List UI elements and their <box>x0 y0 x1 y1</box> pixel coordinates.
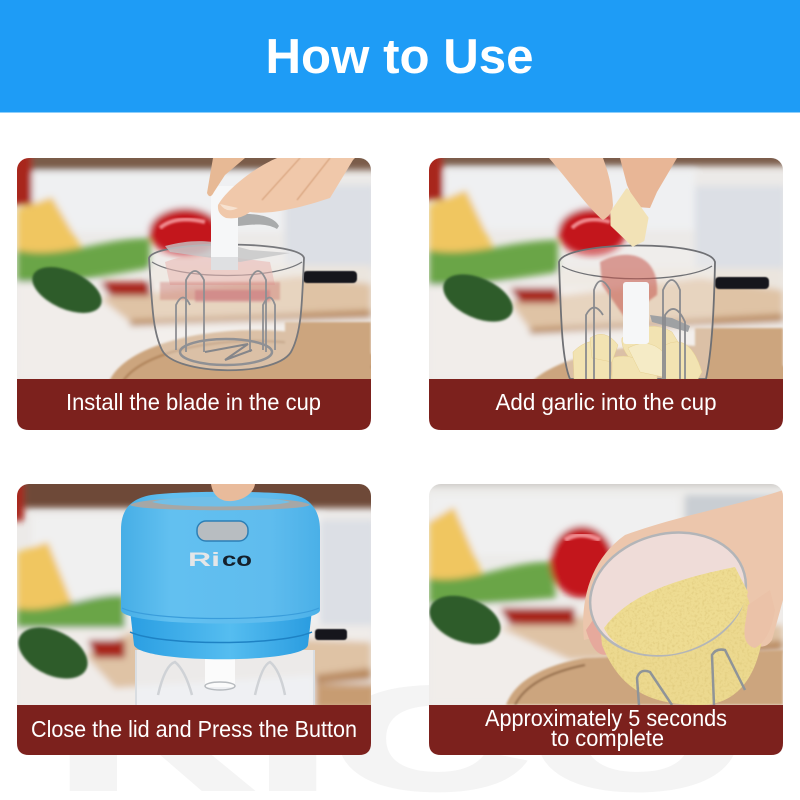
caption text: Install the blade in the cup <box>66 389 321 415</box>
garlic pile <box>573 326 702 379</box>
caption text <box>485 705 727 751</box>
caption bar <box>429 705 783 755</box>
blue lid <box>121 492 320 659</box>
finger <box>211 484 255 501</box>
photo: blue chopper with finger on button <box>10 476 380 709</box>
caption bar <box>17 705 371 755</box>
caption text: Approximately 5 seconds <box>485 705 727 731</box>
power button <box>197 521 248 541</box>
photo: blade being installed in the cup <box>17 158 371 379</box>
blade <box>165 207 289 270</box>
hand <box>549 158 677 220</box>
title: How to Use <box>266 30 534 84</box>
photo: hand holding cup of chopped garlic <box>420 476 790 705</box>
caption bar <box>429 379 783 430</box>
photo: garlic dropped into the cup <box>429 158 783 379</box>
pepper highlights <box>160 220 205 228</box>
cup of chopped garlic <box>588 531 762 705</box>
panel: step 1 install the blade <box>17 158 371 430</box>
chopper cup <box>149 244 304 370</box>
chopper cup with garlic <box>559 246 715 379</box>
clear cup <box>135 650 315 705</box>
header banner <box>0 0 800 112</box>
logo <box>190 552 251 566</box>
caption text: Add garlic into the cup <box>496 389 716 415</box>
caption text: to complete <box>551 725 664 751</box>
panel: step 2 add garlic <box>429 158 783 430</box>
caption text: Close the lid and Press the Button <box>31 716 357 742</box>
caption bar <box>17 379 371 430</box>
logo: Ri <box>188 550 220 571</box>
logo: co <box>222 550 252 571</box>
panel: step 3 close the lid <box>10 476 380 755</box>
thumb over cup <box>744 604 762 648</box>
panel: step 4 chopped garlic <box>420 476 790 755</box>
hand behind cup <box>583 490 783 647</box>
hand <box>207 158 355 218</box>
garlic clove <box>612 190 647 245</box>
